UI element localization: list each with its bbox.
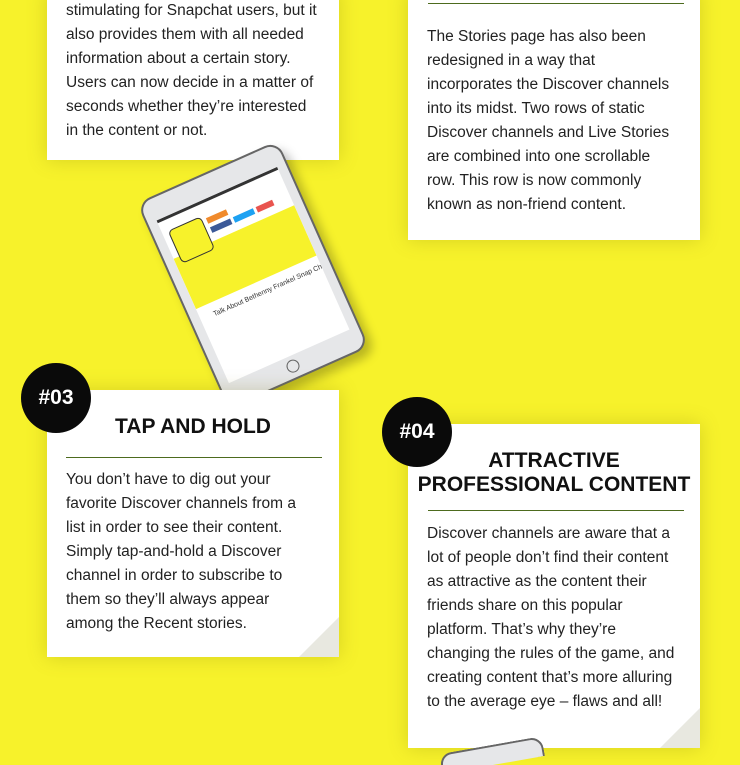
text: card 2 body xyxy=(427,28,669,213)
text: card 1 body: information about a certain story. xyxy=(66,50,291,67)
text: card 1 body xyxy=(66,2,317,139)
tablet screen xyxy=(157,167,349,383)
badge: #04: #04 xyxy=(399,420,435,443)
text: card 2 body: are combined into one scrollable xyxy=(427,148,650,165)
text: card 1 body: also provides them with all needed xyxy=(66,26,304,43)
text: card 4 body: changing the rules of the game, and xyxy=(427,645,674,662)
text: card 3 body: You don’t have to dig out your xyxy=(66,471,271,488)
title: attractive professional content: ATTRACTIVE xyxy=(488,449,620,472)
text: card 1 body: Users can now decide in a matter of xyxy=(66,74,313,91)
text: card 2 body: The Stories page has also been xyxy=(427,28,646,45)
badge: #03: #03 xyxy=(38,386,74,409)
text: card 4 body: platform. That’s why they’re xyxy=(427,621,616,638)
text: card 3 body: list in order to see their content. xyxy=(66,519,282,536)
text: card 4 body: creating content that’s more alluring xyxy=(427,669,672,686)
text: card 4 body: lot of people don’t find their content xyxy=(427,549,668,566)
text: card 4 body: to the average eye – flaws and all! xyxy=(427,693,662,710)
title: attractive professional content: PROFESSIONAL CONTENT xyxy=(418,473,690,496)
text: card 1 body: in the content or not. xyxy=(66,122,207,139)
text: card 4 body: Discover channels are aware that a xyxy=(427,525,670,542)
text: card 3 body xyxy=(66,471,296,632)
card: tap and hold xyxy=(47,390,339,657)
text: card 1 body: seconds whether they’re interested xyxy=(66,98,306,115)
text: card 3 body: among the Recent stories. xyxy=(66,615,247,632)
text: card 2 body: redesigned in a way that xyxy=(427,52,595,69)
tablet illustration xyxy=(137,140,369,410)
text: card 2 body: Discover channels and Live Stories xyxy=(427,124,669,141)
text: card 2 body: incorporates the Discover channels xyxy=(427,76,669,93)
badge: #03 xyxy=(21,363,91,433)
text: card 3 body: channel in order to subscribe to xyxy=(66,567,282,584)
text: card 2 body: into its midst. Two rows of static xyxy=(427,100,645,117)
text: card 3 body: Simply tap-and-hold a Discover xyxy=(66,543,281,560)
text: card 2 body: row. This row is now commonly xyxy=(427,172,641,189)
text: card 1 body: stimulating for Snapchat users, but it xyxy=(66,2,317,19)
tablet partial bottom xyxy=(439,736,545,765)
text: card 3 body: them so they’ll always appear xyxy=(66,591,269,608)
text: card 3 body: favorite Discover channels from a xyxy=(66,495,296,512)
card: top-right xyxy=(408,0,700,240)
text: card 4 body: as attractive as the content their xyxy=(427,573,647,590)
text: card 2 body: known as non-friend content. xyxy=(427,196,626,213)
tablet screen: Talk About Bethenny Frankel Snap Chat xyxy=(212,261,329,318)
title: attractive professional content xyxy=(418,449,690,496)
text: card 4 body: friends share on this popular xyxy=(427,597,623,614)
badge: #04 xyxy=(382,397,452,467)
card: top-left xyxy=(47,0,339,160)
text: card 4 body xyxy=(427,525,674,710)
card: attractive professional content xyxy=(408,424,700,748)
title: tap and hold: TAP AND HOLD xyxy=(115,415,271,438)
